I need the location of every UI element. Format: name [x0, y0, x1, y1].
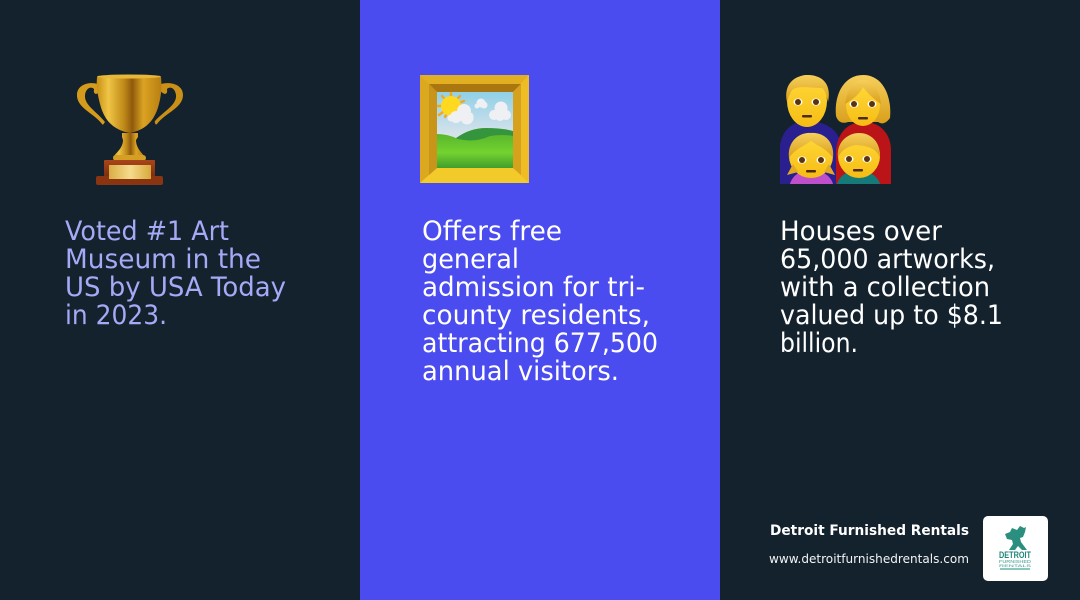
text block: free general admission: admission for tri- [422, 272, 645, 303]
text block: artworks collection [780, 216, 1003, 359]
text block: free general admission: attracting 677,500 [422, 328, 658, 359]
text block: artworks collection: Houses over [780, 216, 943, 247]
text block: free general admission: general [422, 244, 519, 275]
text block: free general admission: county residents, [422, 300, 650, 331]
website url: www.detroitfurnishedrentals.com [769, 551, 969, 566]
text block: artworks collection: billion. [780, 328, 858, 359]
text block: artworks collection: 65,000 artworks, [780, 244, 995, 275]
logo: Detroit Furnished Rentals [983, 516, 1048, 581]
text block: voted number one art museum [65, 216, 286, 331]
text block: voted number one art museum: Museum in the [65, 244, 261, 275]
logo: Detroit Furnished Rentals: FURNISHED [999, 559, 1032, 564]
text block: artworks collection: valued up to $8.1 [780, 300, 1003, 331]
text block: voted number one art museum: Voted #1 Art [65, 216, 229, 247]
icon detail: sun [438, 93, 464, 117]
text block: artworks collection: with a collection [780, 272, 990, 303]
icon: gold trophy [77, 74, 183, 185]
text block: free general admission [422, 216, 658, 387]
icon: family of four [780, 75, 891, 184]
logo: Detroit Furnished Rentals: RENTALS [999, 564, 1032, 568]
text block: voted number one art museum: US by USA Today [65, 272, 286, 303]
text block: free general admission: Offers free [422, 216, 562, 247]
icon: framed landscape picture [420, 75, 529, 183]
text block: voted number one art museum: in 2023. [65, 300, 167, 331]
text block: free general admission: annual visitors. [422, 356, 619, 387]
logo: Detroit Furnished Rentals: DETROIT [999, 550, 1031, 560]
panel: center column background [360, 0, 720, 600]
brand name: Detroit Furnished Rentals [770, 523, 969, 539]
